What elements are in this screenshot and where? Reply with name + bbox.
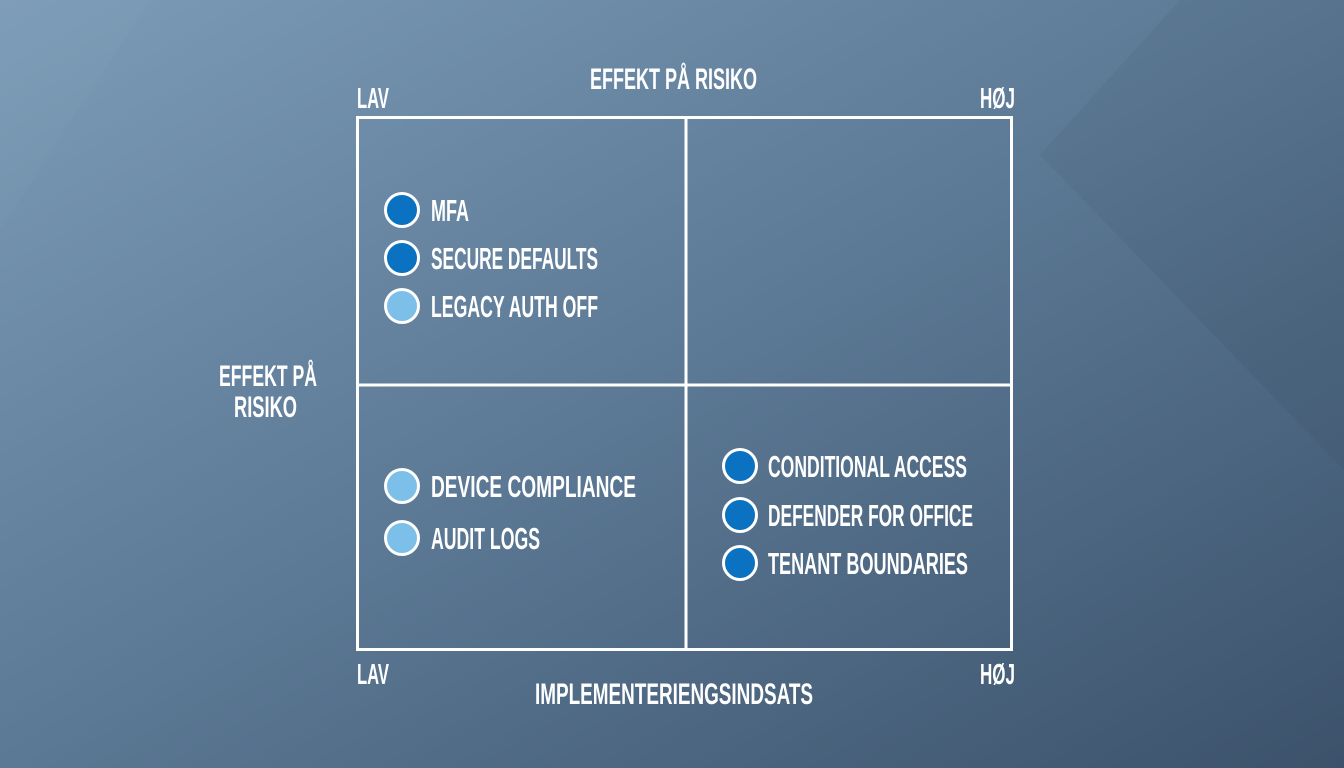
top axis title: EFFEKT PÅ RISIKO: [590, 63, 757, 96]
item: DEVICE COMPLIANCE: [386, 469, 636, 504]
quadrant: bottom-left items: [386, 469, 636, 556]
bottom axis low label: LAV: [357, 659, 389, 691]
item: MFA: [386, 193, 469, 228]
left axis title: RISIKO: [234, 391, 297, 424]
item: AUDIT LOGS: AUDIT LOGS: [431, 521, 540, 556]
item: LEGACY AUTH OFF: LEGACY AUTH OFF: [431, 289, 598, 324]
item: TENANT BOUNDARIES: [724, 546, 968, 581]
quadrant: top-left items: [386, 193, 598, 324]
item: MFA: MFA: [431, 193, 469, 228]
bottom axis high label: HØJ: [980, 659, 1015, 691]
item: CONDITIONAL ACCESS: CONDITIONAL ACCESS: [768, 449, 967, 484]
item: SECURE DEFAULTS: [386, 241, 598, 276]
quadrant: bottom-right items: [724, 449, 973, 581]
top axis low label: LAV: [357, 83, 389, 115]
top axis high label: HØJ: [980, 83, 1015, 115]
matrix grid: [357, 117, 1012, 650]
item: DEVICE COMPLIANCE: DEVICE COMPLIANCE: [431, 469, 636, 504]
item: DEFENDER FOR OFFICE: DEFENDER FOR OFFICE: [768, 498, 973, 533]
item: CONDITIONAL ACCESS: [724, 449, 967, 484]
item: AUDIT LOGS: [386, 521, 540, 556]
item: DEFENDER FOR OFFICE: [724, 498, 973, 533]
left axis title: [219, 360, 317, 424]
item: SECURE DEFAULTS: SECURE DEFAULTS: [431, 241, 598, 276]
bottom axis title: IMPLEMENTERIENGSINDSATS: [535, 678, 813, 711]
left axis title: EFFEKT PÅ: [219, 360, 317, 393]
item: LEGACY AUTH OFF: [386, 289, 598, 324]
item: TENANT BOUNDARIES: TENANT BOUNDARIES: [768, 546, 968, 581]
